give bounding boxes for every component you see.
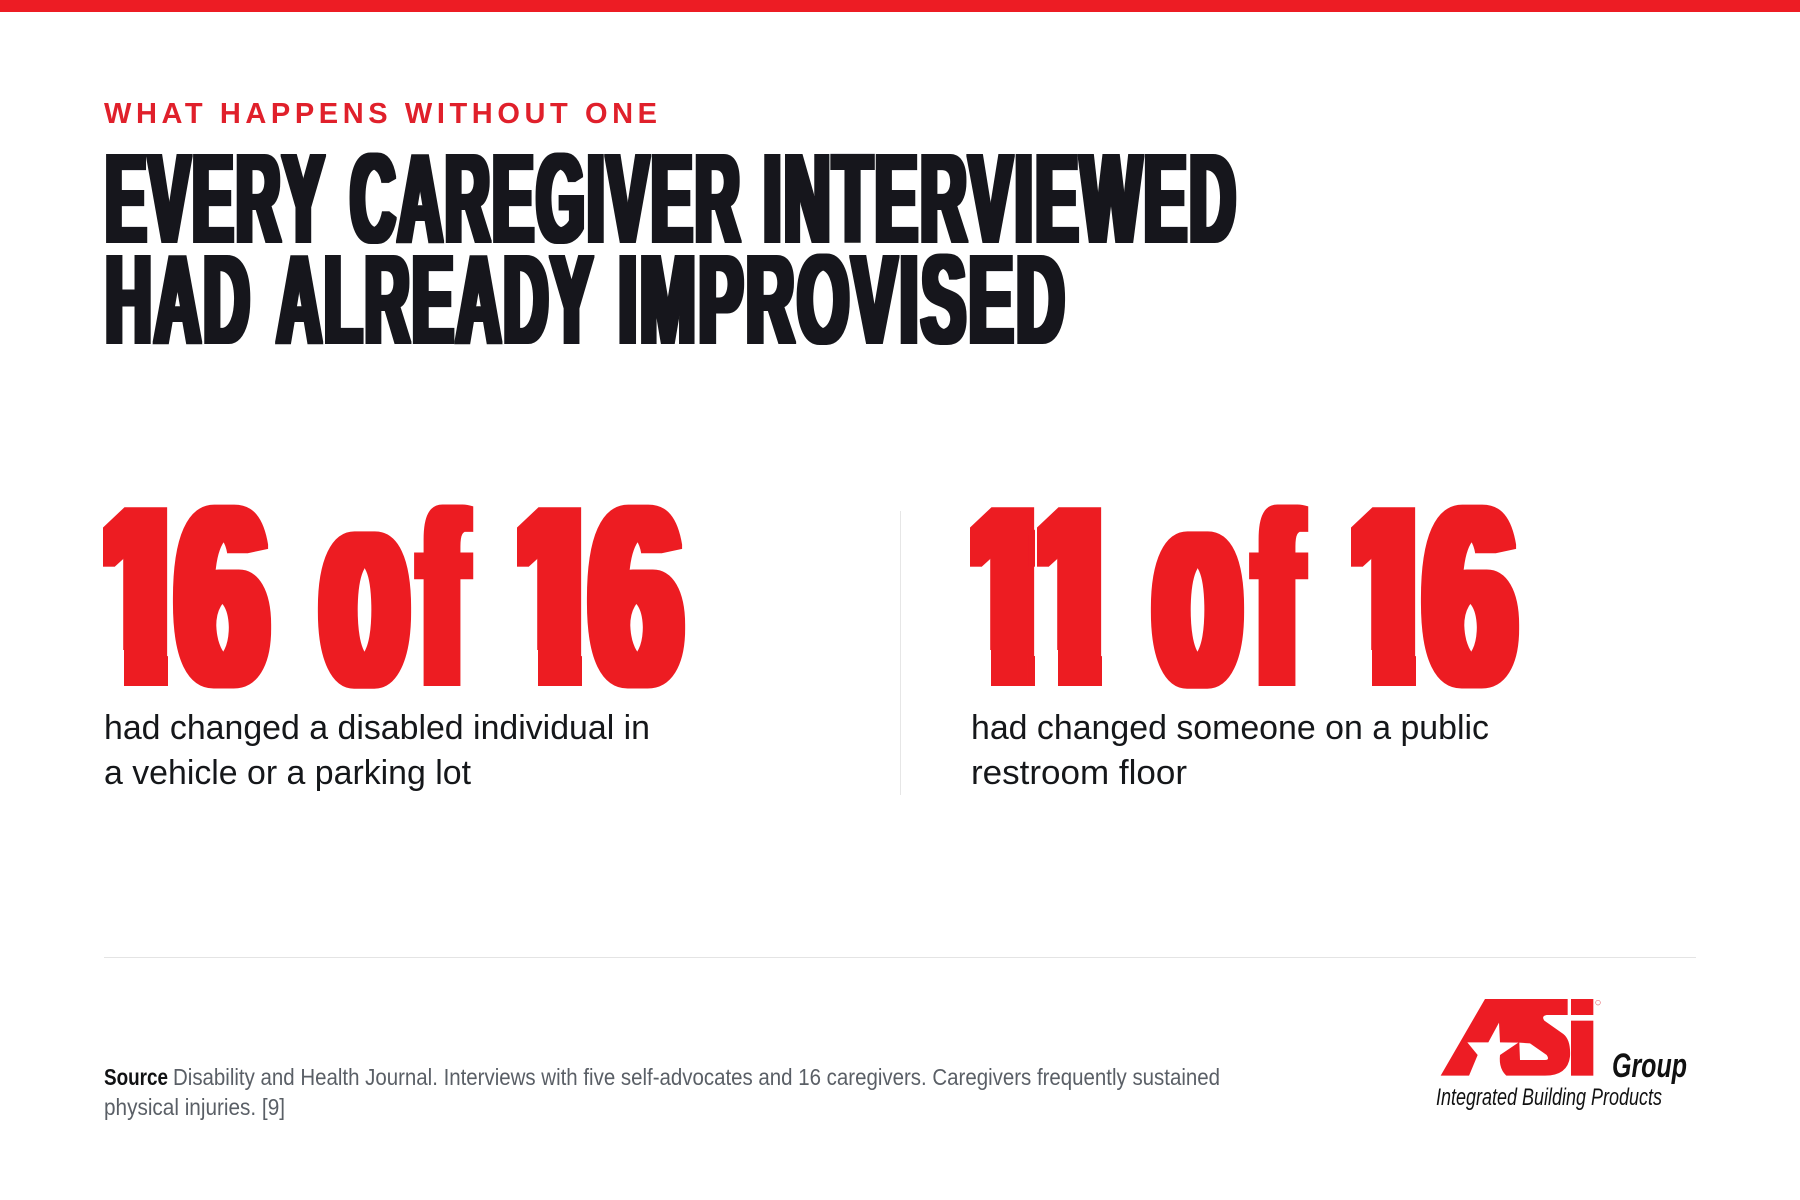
source note: physical injuries. [9] bbox=[104, 1094, 285, 1120]
top accent bar bbox=[0, 0, 1800, 12]
big number: 11 of 16: 1 bbox=[1026, 454, 1124, 738]
stat description: restroom floor bbox=[971, 754, 1187, 792]
main headline: INTERVIEWED bbox=[764, 128, 1238, 269]
stat description bbox=[971, 709, 1489, 792]
source note: Source bbox=[104, 1064, 168, 1090]
big number: 16 of 16: o bbox=[322, 432, 406, 744]
stat description: had changed a disabled individual in bbox=[104, 709, 650, 747]
big number: 11 of 16: 1 bbox=[960, 454, 1056, 738]
stat description bbox=[104, 709, 650, 792]
big number: 16 of 16: f bbox=[422, 462, 464, 736]
logo text: Group: Group bbox=[1612, 1047, 1687, 1085]
big number: 16 of 16: 1 bbox=[506, 454, 604, 738]
main headline: CAREGIVER bbox=[350, 128, 742, 269]
stat description: a vehicle or a parking lot bbox=[104, 754, 472, 792]
big number: 16 of 16: 6 bbox=[591, 454, 681, 738]
main headline bbox=[106, 128, 1238, 370]
eyebrow heading: WHAT HAPPENS WITHOUT ONE bbox=[104, 98, 657, 130]
big number: 11 of 16: 6 bbox=[1425, 454, 1515, 738]
logo: ASi Group bbox=[1436, 999, 1687, 1111]
stat description: had changed someone on a public bbox=[971, 709, 1489, 747]
panel: stat 11 of 16 bbox=[947, 432, 1515, 792]
big number: 16 of 16: 1 bbox=[92, 454, 190, 738]
big number: 11 of 16 bbox=[947, 432, 1515, 744]
big number: 11 of 16: 1 bbox=[1340, 454, 1438, 738]
main headline: ALREADY bbox=[277, 229, 595, 370]
logo text: tagline: Integrated Building Products bbox=[1436, 1084, 1662, 1111]
big number: 16 of 16: 6 bbox=[177, 454, 267, 738]
panel: stat 16 of 16 bbox=[80, 432, 681, 792]
icon: ASi mark bbox=[1441, 999, 1600, 1077]
main headline: IMPROVISED bbox=[618, 229, 1068, 370]
main headline: HAD bbox=[106, 229, 252, 370]
source note: Disability and Health Journal. Interviews with five self-advocates and 16 caregivers. Caregivers frequently sustained bbox=[173, 1064, 1220, 1090]
big number: 16 of 16 bbox=[80, 432, 681, 744]
big number: 11 of 16: f bbox=[1257, 462, 1299, 736]
main headline: EVERY bbox=[106, 128, 326, 269]
source note bbox=[104, 1064, 1220, 1120]
big number: 11 of 16: o bbox=[1156, 432, 1240, 744]
